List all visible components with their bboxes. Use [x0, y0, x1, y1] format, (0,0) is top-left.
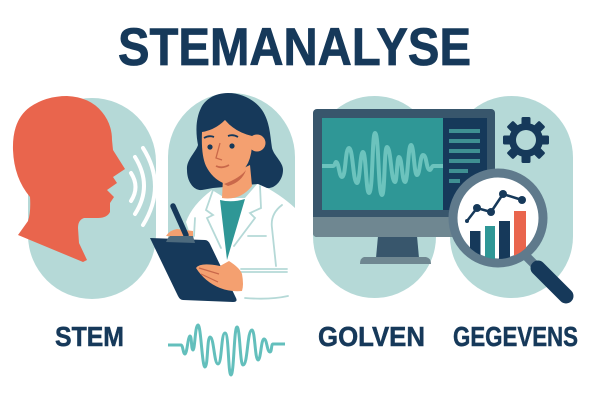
icon: finger lines — [199, 268, 219, 282]
panel: gegevens — [453, 117, 578, 352]
chart: line in lens — [465, 190, 526, 223]
background pill: gegevens — [450, 96, 573, 298]
icon: clipboard clip — [166, 236, 195, 243]
icon: sound waves — [131, 148, 155, 225]
icon: small waveform — [168, 325, 285, 375]
icon: magnifier handle — [527, 257, 535, 265]
icon: side panel lines — [449, 129, 480, 183]
background pill: stem — [28, 98, 156, 299]
background pill: scientist — [168, 93, 295, 250]
icon: head silhouette — [13, 96, 125, 262]
icon: upper hand — [166, 229, 193, 238]
icon: gear — [503, 117, 549, 163]
panel: stem — [13, 96, 156, 352]
label: stem: STEM — [55, 321, 124, 352]
icon: teal shirt — [220, 199, 245, 260]
icon: lab coat — [186, 183, 297, 300]
icon: pen — [173, 206, 186, 235]
icon: magnifier grip — [538, 268, 566, 296]
icon: monitor body — [313, 109, 495, 237]
title: STEMANALYSE — [118, 18, 471, 77]
label: golven: GOLVEN — [318, 321, 425, 352]
icon: facial features — [204, 135, 238, 167]
icon: clipboard — [150, 238, 237, 302]
icon: hair — [187, 93, 283, 190]
chart: bars in lens — [470, 211, 526, 259]
icon: monitor waveform — [322, 133, 443, 195]
icon: monitor stand — [376, 236, 419, 258]
icon: coat details — [194, 186, 288, 299]
icon: magnifier lens — [453, 173, 543, 263]
icon: monitor base — [360, 257, 431, 264]
icon: neck shadow — [224, 170, 246, 186]
icon: neck and face — [202, 120, 266, 198]
background pill: golven — [313, 96, 436, 298]
icon: lower hand — [196, 261, 243, 291]
panel: golven — [313, 96, 495, 352]
panel: scientist — [150, 93, 297, 375]
